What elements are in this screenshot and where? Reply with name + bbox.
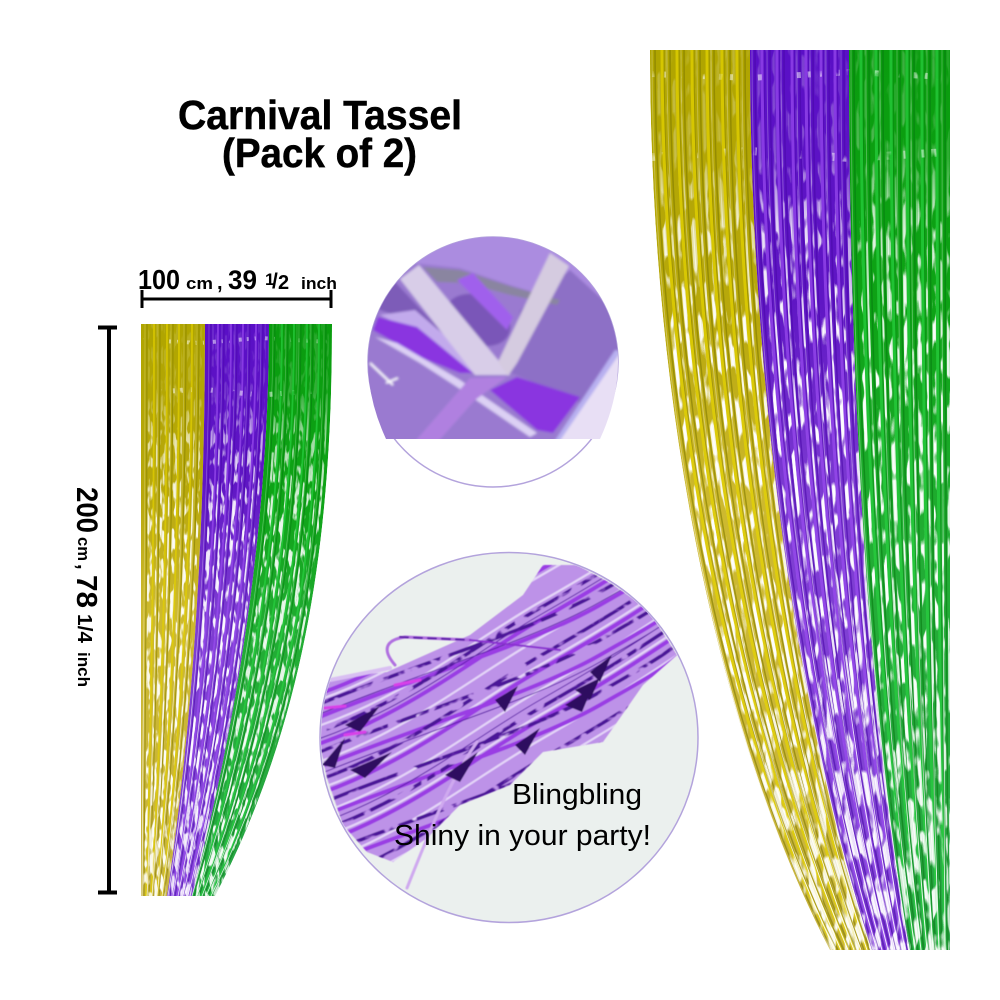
width label: cm: [186, 274, 213, 293]
width label: inch: [301, 274, 337, 293]
caption: [394, 779, 651, 852]
height label: 78: [70, 575, 102, 608]
green band: [849, 50, 951, 950]
yellow band: [650, 50, 873, 950]
caption: Blingbling: [512, 779, 642, 811]
bright strands: [321, 564, 677, 862]
height dimension: [70, 327, 117, 893]
large tassel curtain: [650, 50, 951, 950]
caption: Shiny in your party!: [394, 820, 651, 852]
width label: 2: [278, 272, 289, 294]
foil and ribbons: [368, 237, 618, 439]
height bracket: [98, 327, 117, 893]
dark foil flecks: [322, 655, 612, 782]
tinsel bundle: [321, 564, 678, 890]
purple band: [167, 324, 269, 896]
height label: [70, 487, 103, 687]
yellow band: [141, 324, 205, 896]
title: Carnival Tassel: [178, 92, 462, 138]
width label: ,: [217, 272, 223, 294]
width label: [138, 264, 337, 295]
sparkle rows: [652, 72, 948, 158]
width dimension: [138, 264, 337, 308]
title: [178, 92, 462, 176]
width label: /: [272, 270, 278, 293]
title: (Pack of 2): [222, 130, 417, 176]
width label: 39: [228, 265, 257, 295]
width label: 1: [265, 270, 274, 289]
height label: 1/4: [73, 614, 95, 644]
dark strands: [322, 574, 674, 858]
detail circle: ribbon tie: [360, 230, 625, 487]
height label: inch: [74, 652, 93, 687]
width bracket: [142, 290, 331, 308]
pale strands: [322, 564, 676, 862]
purple band: [750, 50, 911, 950]
height label: ,: [73, 564, 95, 570]
green band: [192, 324, 332, 896]
detail circle: shiny tinsel: [319, 552, 699, 924]
height label: cm: [74, 537, 93, 561]
small tassel curtain: [141, 324, 332, 896]
width label: 100: [138, 264, 180, 295]
height label: 200: [70, 487, 103, 533]
sparkle rows: [143, 338, 330, 395]
